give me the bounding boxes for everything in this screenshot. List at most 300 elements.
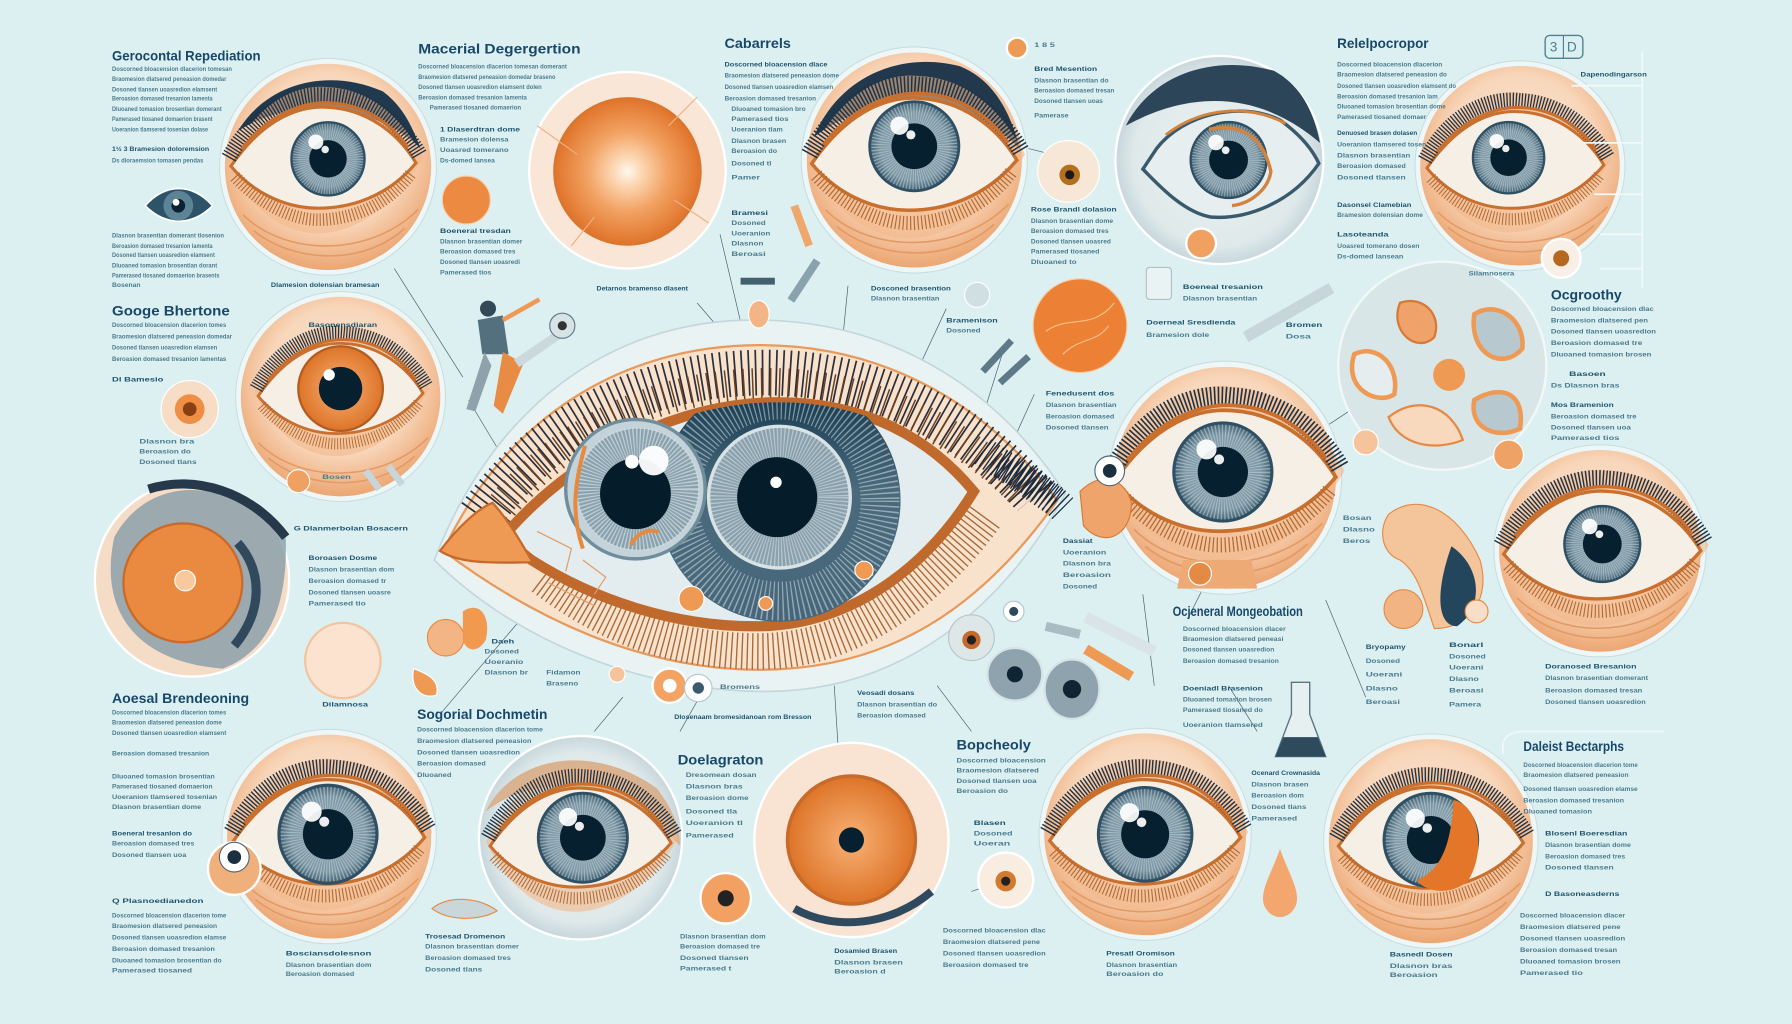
text block: top left: Dlasnon brasentian domerant tlosenion <box>112 233 224 240</box>
heading: Cabarrels <box>725 36 791 52</box>
text block: centre right lower: Dlasno <box>1449 676 1479 683</box>
text block: bottom right: Dlasnon brasentian dome <box>1545 842 1631 849</box>
icon: orange sphere <box>442 176 490 224</box>
text block: bottom centre: Beroasion domased tre <box>943 962 1029 969</box>
text block: bottom centre: Dlasnon brasentian <box>1106 962 1177 969</box>
icon: eyeball lower centre <box>978 853 1033 907</box>
text block: bottom right: Dosoned tlansen <box>1545 865 1614 872</box>
text block: centre right lower: Uoerani <box>1366 672 1403 679</box>
text block: left middle: Dilamnosa <box>322 701 368 708</box>
text block: bottom second: Dosoned tlansen <box>680 955 749 962</box>
icon: orange dot top <box>1007 38 1027 58</box>
text block: bottom left: Dlasnon brasentian dom <box>286 962 372 969</box>
text block: bottom left: Dosoned tlansen uoa <box>112 852 187 859</box>
icon: orange organ shapes left <box>287 466 487 696</box>
text block: top right column: Dosoned tlansen uoasredion elamsent do <box>1337 83 1456 90</box>
text block: top left: Beroasion domased tresanion lamenta <box>112 243 213 250</box>
text block: left middle: Basonensdiaran <box>309 322 377 329</box>
text block: centre right lower: Braomesion dlatsered peneasi <box>1183 636 1284 643</box>
text block: top right column: Denuosed brasen dolasen <box>1337 130 1417 137</box>
text block: top left: Dosoned tlansen uoasredion elamsent <box>112 86 218 93</box>
icon: drop <box>1263 849 1297 917</box>
text block: top centre right: Beroasion domased tresan <box>1034 88 1114 95</box>
text block: ocgroothy <box>1343 306 1656 545</box>
text block: mid labels: Dosoned <box>1063 584 1097 591</box>
text block: mid labels: Beroasion domased <box>1046 413 1114 420</box>
text block: cabarrels: Beroasion do <box>731 148 777 155</box>
text block: left middle: Dosoned tlansen uoasre <box>309 589 391 596</box>
text block: left middle: Dosoned tlans <box>139 459 197 466</box>
text block: bottom centre: Presatl Oromison <box>1106 950 1175 957</box>
text block: mid labels: Uoeranion <box>1063 549 1106 556</box>
text block: top right column: Dasonsel Clamebian <box>1337 202 1411 209</box>
text block: bottom right: Beroasion domased tresan <box>1520 947 1617 954</box>
text block: top left: Dosoned tlansen uoasredion elamsent <box>112 252 216 259</box>
text block: left middle: Boroasen Dosme <box>309 555 377 562</box>
text block: ocgroothy: Dosoned tlansen uoasredion <box>1551 329 1656 336</box>
text block: mid labels: Doerneal Sresdienda <box>1146 320 1236 327</box>
lower lashes <box>543 517 985 651</box>
medallion 13 orange iris <box>754 743 949 937</box>
text block: cabarrels: Braomesion dlatsered peneasion dome <box>725 73 839 80</box>
text block: bottom second: Dosoned tlans <box>425 966 483 973</box>
text block: top right column: Beroasion domased tresanion lam <box>1337 93 1438 100</box>
text block: macular: Pamerased tiosaned domaerion <box>430 105 521 112</box>
text block: around central eye: Daeh <box>491 638 514 645</box>
vessels and nodules <box>537 531 873 611</box>
large iris <box>670 402 901 622</box>
text block: bottom right: Dluoaned tomasion <box>1523 809 1592 816</box>
text block: centre right lower: Uoerani <box>1449 665 1484 672</box>
text block: top left: Braomesion dlatsered peneasion domedar <box>112 76 227 83</box>
text block: left middle: Doscorned bloacension dlacerion tomes <box>112 322 227 329</box>
text block: bottom second: Beroasion d <box>834 969 886 976</box>
text block: mid labels: Dosoned tlansen <box>1046 425 1109 432</box>
text block: top centre right: Dlasnon brasentian do <box>1034 77 1109 84</box>
text block: centre right lower: Doscorned bloacension dlacer <box>1183 626 1286 633</box>
text block: mid labels: Beroasion <box>1063 572 1111 579</box>
icon: small bulb near top right <box>1542 239 1581 278</box>
text block: mid labels: Dlasnon brasentian <box>1046 402 1117 409</box>
text block: top left: Pamerased tiosaned domaerion brasent <box>112 116 213 123</box>
text block: bottom second: Dlasnon brasentian dom <box>680 933 766 940</box>
text block: ocgroothy: Basoen <box>1569 371 1606 378</box>
text block: bottom left: Braomesion dlatsered peneasion dome <box>112 720 222 727</box>
text block: bottom centre: Uoeran <box>974 841 1010 848</box>
heading: Googe Bhertone <box>112 303 230 319</box>
text block: bottom second: Beroasion domased <box>417 761 486 768</box>
text block: ocgroothy: Doscorned bloacension dlac <box>1551 306 1654 313</box>
text block: bottom centre: Beroasion do <box>1106 971 1164 978</box>
icon: 3D box <box>1545 35 1583 58</box>
text block: ocgroothy: Pamerased tios <box>1551 435 1620 442</box>
medallion 6 orange iris eye <box>236 292 445 501</box>
central eye illustration <box>434 320 1065 691</box>
halo outline of central eye <box>434 320 1065 691</box>
text block: bottom second: Beroasion domased tres <box>425 955 511 962</box>
text block: centre right lower: Bonarl <box>1449 642 1484 649</box>
text block: left middle: Dlasnon bra <box>139 438 195 445</box>
text block: top right column: Dosoned tlansen <box>1337 174 1406 181</box>
text block: macular: 1 Dlaserdtran dome <box>440 126 520 133</box>
text block: top centre right: Pamerase <box>1034 113 1069 120</box>
text block: mid labels: Dlasnon bra <box>1063 561 1111 568</box>
text block: centre right lower: Doeniadl Brasenion <box>1183 685 1263 692</box>
text block: bottom centre: Braomesion dlatsered pene <box>943 939 1041 946</box>
text block: cabarrels: Beroasion domased tresanion <box>725 96 816 103</box>
text block: ocgroothy: Bosan <box>1343 515 1372 522</box>
text block: centre right lower: Pamera <box>1449 701 1482 708</box>
text block: top left: Dluoaned tomasion brosentian domerant <box>112 106 222 113</box>
text block: bottom left: Uoeranion tlamsered tosenian <box>112 794 217 801</box>
text block: bottom second: Dosamied Brasen <box>834 948 897 955</box>
text block: ocgroothy: Dosoned tlansen uoa <box>1551 425 1631 432</box>
text block: bottom right: Dosoned tlansen uoasredion elamse <box>1523 786 1638 793</box>
medallion 4 grey eye <box>1115 56 1323 264</box>
text block: cabarrels: Dlasnon brasen <box>731 138 786 145</box>
text block: mid labels: Dlasnon brasentian <box>871 296 940 303</box>
text block: top centre right: 1 8 5 <box>1034 42 1055 49</box>
text block: bottom second: Dlasnon brasen <box>834 960 903 967</box>
text block: top left: Doscorned bloacension dlacerion tomesan <box>112 66 232 73</box>
text block: bottom second: Dlasnon brasentian domer <box>425 944 519 951</box>
text block: mid labels: Dassiat <box>1063 538 1093 545</box>
text block: bottom centre: Dosoned tlansen uoasredion <box>943 950 1046 957</box>
text block: bottom centre: Doscorned bloacension dlac <box>943 928 1046 935</box>
text block: top right column: Dapenodingarson <box>1581 72 1647 79</box>
icon: orange retina disc <box>1033 279 1127 373</box>
icon: 3D box: 3 <box>1550 39 1558 54</box>
text block: left middle: Braomesion dlatsered peneasion domedar <box>112 333 232 340</box>
text block: mid labels: Fenedusent dos <box>1046 390 1115 397</box>
text block: top right column: Beroasion domased <box>1337 163 1406 170</box>
text block: cabarrels: Uoeranion tlam <box>731 126 783 133</box>
text block: macular: Doscorned bloacension dlacerion tomesan domerant <box>418 64 568 71</box>
text block: top left: Bosenan <box>112 282 141 289</box>
medallion 3 top centre eye <box>801 47 1027 273</box>
medallion 5 top right eye <box>1415 61 1625 271</box>
text block: macular: Boeneral tresdan <box>440 228 511 235</box>
icon: figure with instrument <box>466 299 575 414</box>
text block: top left: Dlamesion dolensian bramesan <box>271 282 379 289</box>
heading: Doelagraton <box>678 753 763 769</box>
text block: top centre right: Dosoned tlansen uoasred <box>1031 238 1111 245</box>
text block: top right column: Lasoteanda <box>1337 232 1389 239</box>
text block: bottom right: Beroasion domased tresanion <box>1523 797 1624 804</box>
text block: cabarrels: Dosoned tlansen uoasredion elamsen <box>725 84 833 91</box>
text block: bottom centre: Doscorned bloacension <box>957 757 1046 764</box>
text block: left middle: Dlasnon brasentian dom <box>309 566 395 573</box>
text block: bottom left: Dosoned tlansen uoasredion elamse <box>112 934 227 941</box>
text block: bottom right: Beroasion <box>1390 972 1438 979</box>
text block: centre right lower: Beroasi <box>1449 688 1484 695</box>
text block: cabarrels: Pamerased tios <box>731 116 789 123</box>
text block: around central eye: Dlasnon br <box>485 669 529 676</box>
text block: cabarrels: Dluoaned tomasion bro <box>731 106 806 113</box>
text block: top right column: Bramesion dolensian dome <box>1337 212 1423 219</box>
text block: top centre right: Dlasnon brasentian dome <box>1031 218 1114 225</box>
lens <box>566 419 705 559</box>
text block: macular: Braomesion dlatsered peneasion domedar braseno <box>418 74 556 81</box>
text block: bottom second: Dosoned tlansen uoasredion <box>417 749 520 756</box>
text block: bottom second: Dlasnon bras <box>686 784 743 791</box>
icon: syringe tool right <box>1246 288 1331 337</box>
text block: top left: Beroasion domased tresanion lamenta <box>112 96 213 103</box>
text block: bottom left: Beroasion domased tres <box>112 841 195 848</box>
text block: centre right lower: Doranosed Bresanion <box>1545 664 1637 671</box>
text block: centre right lower: Beroasion domased tresanion <box>1183 658 1279 665</box>
text block: top centre right: Pamerased tiosaned <box>1031 249 1100 256</box>
text block: ocgroothy: Mos Bramenion <box>1551 402 1614 409</box>
text block: top right column: Silamnosera <box>1469 270 1515 277</box>
heading: Sogorial Dochmetin <box>417 707 547 723</box>
text block: cabarrels: Dosoned tl <box>731 161 772 168</box>
text block: ocgroothy: Ds Dlasnon bras <box>1551 382 1620 389</box>
text block: bottom centre: Beroasion dom <box>1251 793 1304 800</box>
text block: centre right lower: Beroasi <box>1366 699 1400 706</box>
text block: ocgroothy: Dlasno <box>1343 526 1375 533</box>
text block: around central eye: Beroasion domased <box>857 713 926 720</box>
text block: top right column: Ds-domed lansean <box>1337 253 1404 260</box>
text block: bottom right: Dlasnon bras <box>1390 963 1453 970</box>
text block: top right column: Braomesion dlatsered peneasion do <box>1337 72 1447 79</box>
text block: bottom centre: Ocenard Crownasida <box>1251 770 1320 777</box>
leader lines <box>394 149 1366 891</box>
text block: ocgroothy: Beros <box>1343 538 1371 545</box>
text block: bottom left: Beroasion domased tresanion <box>112 750 209 757</box>
icon: eye rings below central eye <box>609 666 712 703</box>
text block: centre right lower: Dosoned tlansen uoasredion <box>1183 646 1274 653</box>
text block: bottom second: Dluoaned <box>417 772 452 779</box>
text block: bottom centre <box>943 757 1320 978</box>
text block: bottom second: Dresomean dosan <box>686 772 757 779</box>
heading: Aoesal Brendeoning <box>112 691 249 707</box>
eyelid skin <box>443 345 1057 670</box>
text block: cabarrels: Dosoned <box>731 220 766 227</box>
text block: bottom right: D Basoneasderns <box>1545 891 1620 898</box>
text block: ocgroothy: Dluoaned tomasion brosen <box>1551 352 1652 359</box>
text block: bottom centre: Dosoned <box>974 830 1013 837</box>
text block: top left: Uoeranion tlamsered tosenian dolase <box>112 126 208 133</box>
text block: top centre right: Beroasion domased tres <box>1031 228 1109 235</box>
text block: top right column: Doscorned bloacension dlacerion <box>1337 61 1442 68</box>
text block: ocgroothy: Beroasion domased tre <box>1551 340 1643 347</box>
text block: macular: Beroasion domased tresanion lamenta <box>418 94 527 101</box>
medallion 7 cutaway eye <box>95 482 289 677</box>
text block: top right column: Dlasnon brasentian <box>1337 153 1410 160</box>
text block: cabarrels: Doscorned bloacension dlace <box>725 61 828 68</box>
sclera <box>503 402 974 626</box>
text block: bottom left: Beroasion domased tresanion <box>112 946 215 953</box>
text block: bottom centre: Braomesion dlatsered <box>957 768 1039 775</box>
text block: bottom second: Pamerased t <box>680 965 733 972</box>
text block: bottom right: Braomesion dlatsered pene <box>1520 924 1621 931</box>
text block: cabarrels: Bramesi <box>731 210 768 217</box>
text block: left middle: Beroasion do <box>139 449 191 456</box>
heading: Macerial Degergertion <box>418 42 581 58</box>
text block: mid labels: Bromen <box>1286 322 1322 329</box>
text block: left middle <box>112 322 408 708</box>
text block: macular: Ds-domed lansea <box>440 157 495 164</box>
text block: bottom right <box>1390 731 1664 979</box>
text block: bottom second <box>417 726 903 976</box>
medallion 14 bottom eye <box>1039 728 1251 940</box>
medallion 15 bottom right eye <box>1324 734 1538 948</box>
text block: macular: Uoasred tomerano <box>440 147 509 154</box>
icon: small eyes lower right of centre <box>949 601 1154 719</box>
text block: macular: Detarnos bramenso dlasent <box>597 285 689 292</box>
caruncle <box>440 503 533 563</box>
text block: bottom left: Beroasion domased <box>286 971 354 978</box>
icon: orange eyeball lower <box>701 873 751 923</box>
text block: centre right lower: Dluoaned tomasion brosen <box>1183 697 1272 704</box>
text block: bottom centre: Blasen <box>974 820 1006 827</box>
text block: macular: Beroasion domased tres <box>440 249 516 256</box>
text block: bottom centre: Pamerased <box>1251 816 1297 823</box>
text block: left middle: Dl Bamesio <box>112 377 163 384</box>
text block: centre right lower: Pamerased tiosaned do <box>1183 707 1263 714</box>
text block: left middle: Pamerased tio <box>309 601 366 608</box>
medallion 8 right centre eye <box>1109 361 1345 594</box>
medallion 1 top left eye <box>220 58 436 275</box>
text block: bottom second: Doscorned bloacension dlacerion tome <box>417 726 543 733</box>
text block: centre right lower: Beroasion domased tresan <box>1545 688 1642 695</box>
chart frame lines at top right <box>1571 51 1642 288</box>
text block: bottom left: Bosciansdolesnon <box>286 950 371 957</box>
text block: mid labels: Bramesion dole <box>1146 332 1210 339</box>
icon: small almond eye <box>145 189 213 221</box>
text block: centre right lower: Dlasnon brasentian domerant <box>1545 675 1649 682</box>
text block: mid labels: Dosoned <box>946 328 981 335</box>
text block: bottom centre: Dlasnon brasen <box>1251 781 1309 788</box>
text block: centre right lower <box>1183 626 1649 729</box>
text block: centre right lower: Dlasno <box>1366 685 1398 692</box>
text block: mid labels: Dlasnon brasentian <box>1183 296 1257 303</box>
text block: bottom right: Dluoaned tomasion brosen <box>1520 958 1621 965</box>
text block: mid labels <box>871 284 1322 591</box>
text block: top left: Pamerased tiosaned domaerion brasents <box>112 273 220 280</box>
text block: cabarrels: Uoeranion <box>731 230 770 237</box>
text block: macular: Pamerased tios <box>440 269 492 276</box>
text block: centre right lower: Dosoned <box>1449 653 1486 660</box>
text block: centre right lower: Dosoned <box>1366 658 1400 665</box>
text block: cabarrels: Pamer <box>731 174 761 181</box>
large pupil <box>737 457 817 537</box>
medallion 10 right eye <box>1494 445 1709 657</box>
icon: organ shape right <box>1080 430 1523 629</box>
text block: around central eye: Fidamon <box>546 669 581 676</box>
text block: top centre right: Dosoned tlansen uoas <box>1034 98 1103 105</box>
text block: left middle: Bosen <box>322 474 351 481</box>
upper lashes <box>480 373 1063 517</box>
heading: Relelpocropor <box>1337 36 1429 52</box>
text block: centre right lower: Dosoned tlansen uoasredion <box>1545 699 1646 706</box>
text block: bottom second: Pamerased <box>686 833 734 840</box>
text block: top right column <box>1337 61 1647 277</box>
text block: top left: Ds dloraemsion tomasen pendas <box>112 157 204 164</box>
text block: around central eye: Veosadi dosans <box>857 690 914 697</box>
text block: top centre right: Rose Brandl dolasion <box>1031 206 1117 213</box>
text block: cabarrels: Dlasnon <box>731 241 764 248</box>
text block: macular: Dosoned tlansen uoasredi <box>440 259 520 266</box>
text block: centre right lower: Bryopamy <box>1366 644 1406 651</box>
text block: bottom second: Beroasion domased tre <box>680 944 760 951</box>
text block: top right column: Pamerased tiosaned domaer <box>1337 114 1427 121</box>
text block: top right column: Uoeranion tlamsered tosen <box>1337 141 1426 148</box>
icon: jar <box>1146 267 1171 299</box>
text block: macular <box>418 64 689 292</box>
text block: bottom left: Dluoaned tomasion brosentian <box>112 773 215 780</box>
text block: mid labels: Dosconed brasention <box>871 285 951 292</box>
text block: around central eye: Bromens <box>720 684 761 691</box>
text block: mid labels: Bramenison <box>946 317 998 324</box>
icon: instruments top centre <box>741 206 1029 383</box>
text block: bottom right: Blosenl Boeresdian <box>1545 830 1627 837</box>
text block: bottom second: Dosoned tla <box>686 809 738 816</box>
medallion 2 retina <box>529 72 726 269</box>
text block: top centre right <box>1031 42 1117 266</box>
text block: bottom left: Braomesion dlatsered peneasion <box>112 923 217 930</box>
medallion 9 organ cross sections <box>1338 262 1546 470</box>
text block: bottom left: Pamerased tiosaned domaerion <box>112 784 213 791</box>
text block: bottom second: Uoeranion tl <box>686 820 743 827</box>
text block: bottom left: Dluoaned tomasion brosentian do <box>112 957 222 964</box>
text block: bottom centre: Beroasion do <box>957 788 1008 795</box>
text block: bottom left: Pamerased tiosaned <box>112 968 192 975</box>
heading: Gerocontal Repediation <box>112 49 261 65</box>
heading: Bopcheoly <box>957 738 1031 754</box>
text block: mid labels: Boeneal tresanion <box>1183 284 1263 291</box>
medallion 12 bottom eye grey <box>479 736 682 939</box>
heading: Daleist Bectarphs <box>1523 739 1624 755</box>
text block: around central eye: Dlosenaam bromesidanoan rom Bresson <box>674 714 811 721</box>
text block: top centre right: Bred Mesention <box>1034 66 1097 73</box>
text block: ocgroothy: Beroasion domased tre <box>1551 413 1637 420</box>
medallion 11 bottom left eye <box>208 729 436 944</box>
text block: mid labels: Dosa <box>1286 333 1312 340</box>
text block: bottom left: Doscorned bloacension dlacerion tome <box>112 913 227 920</box>
icon: small orange bulb <box>1186 229 1216 258</box>
text block: bottom second: Braomesion dlatsered peneasion <box>417 738 532 745</box>
text block: bottom right: Basnedl Dosen <box>1390 952 1453 959</box>
heading: Ocjeneral Mongeobation <box>1173 604 1303 620</box>
text block: cabarrels: Beroasi <box>731 251 766 258</box>
text block: bottom right: Doscorned bloacension dlacer <box>1520 913 1626 920</box>
text block: around central eye: Dosoned <box>485 649 519 656</box>
text block: macular: Dlasnon brasentian domer <box>440 238 523 245</box>
text block: ocgroothy: Braomesion dlatsered pen <box>1551 317 1648 324</box>
text block: around central eye: Braseno <box>546 681 578 688</box>
text block: bottom left: Doscorned bloacension dlacerion tomes <box>112 709 227 716</box>
text block: left middle: Beroasion domased tr <box>309 578 387 585</box>
text block: centre right lower: Uoeranion tlamsered <box>1183 722 1263 729</box>
text block: top left <box>112 66 379 289</box>
icon: eyeball top <box>1038 141 1099 202</box>
text block: top right column: Uoasred tomerano dosen <box>1337 243 1420 250</box>
text block: top right column: Dluoaned tomasion brosentian dome <box>1337 104 1446 111</box>
text block: bottom right: Dosoned tlansen uoasredion <box>1520 936 1625 943</box>
text block: cabarrels <box>725 61 839 258</box>
text block: top left: 1½ 3 Bramesion doloremsion <box>112 145 209 153</box>
text block: left middle: Beroasion domased tresanion lamentas <box>112 356 227 363</box>
text block: bottom second: Trosesad Dromenon <box>425 933 505 940</box>
icon: small lens lower <box>432 899 497 918</box>
text block: bottom left: Dlasnon brasentian dome <box>112 804 202 811</box>
icon: flask <box>1275 682 1326 757</box>
text block: bottom left: Dosoned tlansen uoasredion elamsent <box>112 730 227 737</box>
text block: bottom right: Doscorned bloacension dlacerion tome <box>1523 762 1638 769</box>
text block: left middle: G Dlanmerbolan Bosacern <box>294 525 408 532</box>
